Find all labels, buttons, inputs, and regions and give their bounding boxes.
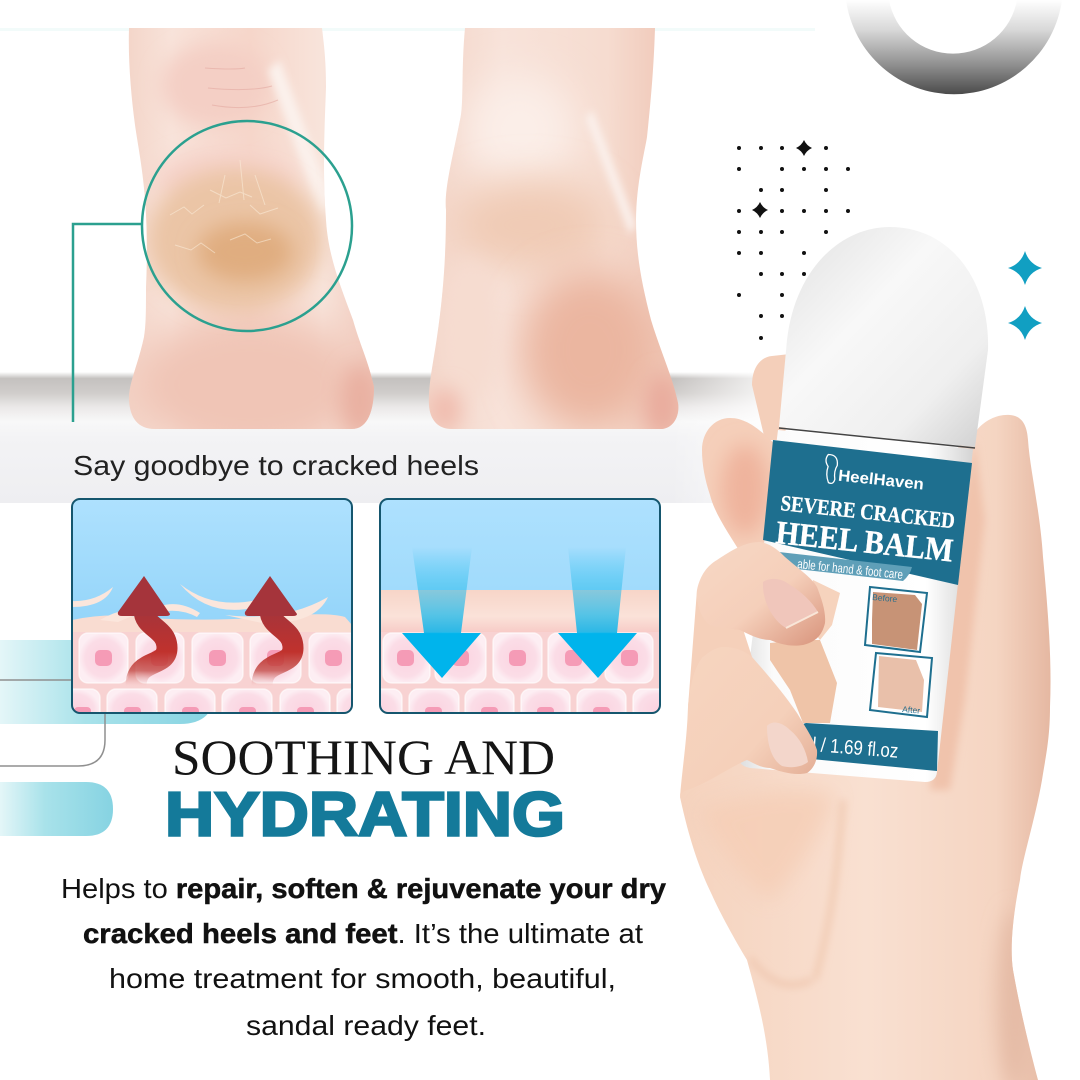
brand logo: HeelHaven — [837, 468, 925, 494]
bottle cap — [779, 227, 988, 447]
cells row 2 — [73, 688, 351, 712]
product name — [774, 490, 956, 570]
suitability tag — [770, 551, 912, 582]
skin flakes — [72, 584, 328, 623]
ankle creases — [205, 68, 278, 108]
front fingers — [680, 542, 825, 797]
fingernail upper — [763, 579, 818, 628]
body text: sandal ready feet. — [246, 1010, 486, 1041]
photo: feet on floor — [0, 28, 815, 503]
right foot — [425, 28, 685, 437]
body text: home treatment for smooth, beautiful, — [109, 963, 616, 994]
body text: cracked heels and feet . It’s the ultimate at — [83, 918, 643, 949]
panel: moisture penetrating skin — [379, 498, 661, 714]
panel: skin losing moisture — [71, 498, 353, 714]
callout ring around cracked heel — [73, 121, 352, 422]
red arrow right — [245, 576, 297, 686]
decorative teal shapes with outline — [0, 640, 215, 836]
clasped hands illustration — [770, 640, 837, 723]
dot grid with black sparkles — [737, 140, 850, 340]
nuclei — [74, 650, 342, 717]
palm shading — [700, 440, 1033, 1080]
nuclei — [397, 650, 638, 717]
left foot — [128, 28, 374, 429]
caption: say goodbye: Say goodbye to cracked heels — [73, 450, 479, 481]
palm and thumb — [680, 415, 1051, 1080]
after photo: After — [902, 704, 921, 716]
suitability tag: able for hand & foot care — [797, 556, 904, 582]
hand behind bottle — [680, 354, 1051, 1080]
gradient half ring top right — [846, 0, 1062, 94]
red arrow left — [118, 576, 170, 686]
web between fingers — [688, 590, 752, 707]
product bottle — [738, 227, 988, 782]
body text: Helps to repair, soften & rejuvenate your dry — [61, 873, 666, 904]
skin band — [380, 590, 660, 634]
blue arrow left — [402, 547, 481, 678]
label top panel — [763, 440, 972, 585]
after photo — [870, 653, 932, 717]
blue sparkles — [1008, 251, 1042, 340]
heel cracks — [170, 160, 278, 253]
heading line 2: HYDRATING — [165, 780, 565, 850]
brand logo — [824, 454, 926, 494]
fingertip behind cap — [752, 354, 790, 440]
cells row 1 — [79, 633, 359, 683]
product name: HEEL BALM — [774, 515, 955, 570]
skin surface — [73, 614, 351, 632]
fingernail lower — [767, 723, 808, 767]
cells row 2 — [381, 688, 659, 712]
blue arrow right — [558, 547, 637, 678]
volume text: l / 1.69 fl.oz — [812, 734, 899, 763]
index finger — [702, 418, 773, 548]
upper front finger — [697, 542, 825, 646]
bottle body — [738, 430, 973, 782]
lower front finger — [680, 647, 817, 797]
heading line 1: SOOTHING AND — [172, 729, 555, 785]
product name: SEVERE CRACKED — [779, 490, 956, 533]
bottom band — [738, 723, 938, 771]
before photo: Before — [872, 592, 898, 604]
body text — [61, 873, 666, 1041]
cells row 1 — [383, 633, 653, 683]
heading — [165, 729, 565, 850]
before photo — [865, 587, 927, 652]
